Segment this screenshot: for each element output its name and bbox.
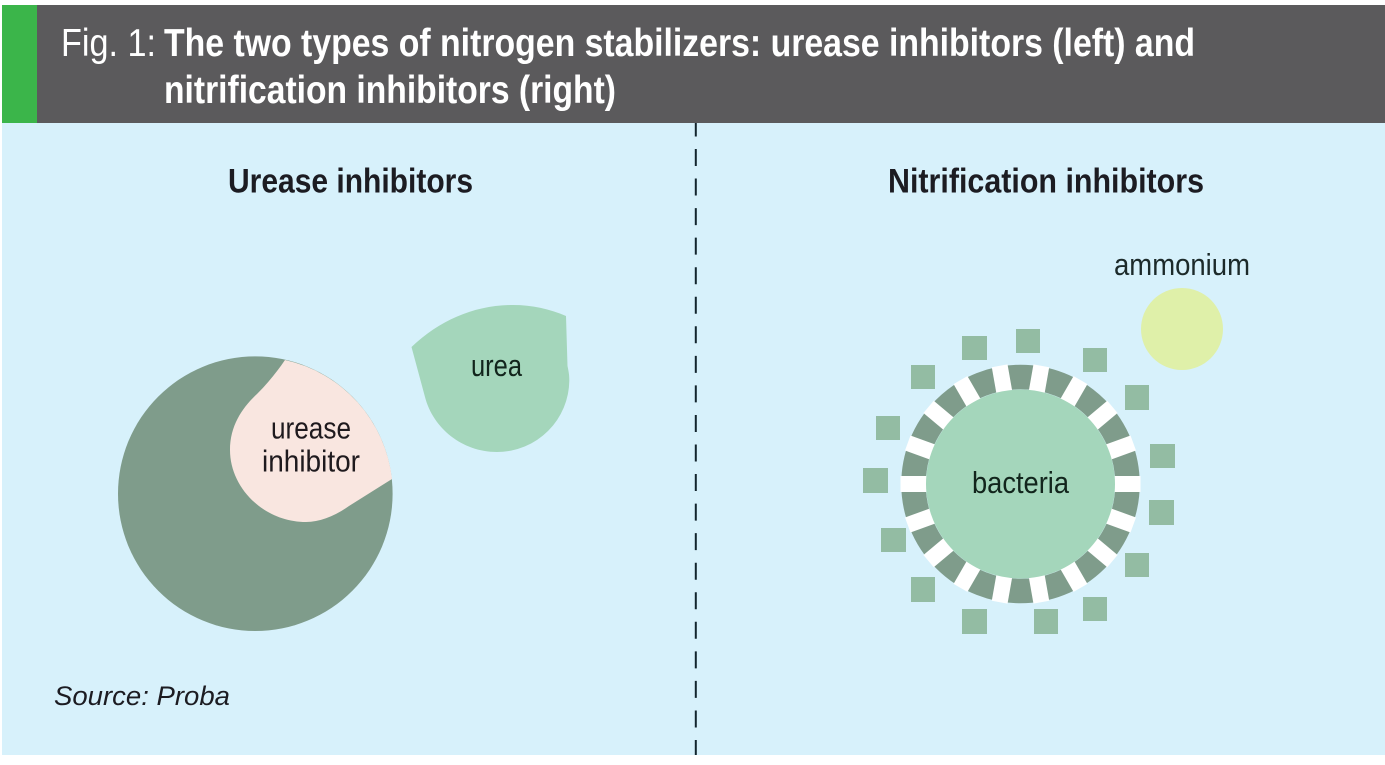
header bar bbox=[2, 5, 1385, 123]
green accent block bbox=[2, 5, 37, 123]
urea shape bbox=[412, 305, 569, 452]
bacterium membrane ring bbox=[900, 366, 1140, 602]
panel divider bbox=[695, 123, 697, 755]
enzyme circle bbox=[118, 356, 393, 631]
bacteria circle: bacteria bbox=[972, 465, 1070, 500]
title bbox=[164, 22, 1195, 112]
title: nitrification inhibitors (right) bbox=[164, 69, 616, 112]
ammonium circle bbox=[1141, 288, 1223, 370]
urease inhibitor shape: inhibitor bbox=[262, 444, 360, 478]
title: The two types of nitrogen stabilizers: urease inhibitors (left) and bbox=[164, 22, 1195, 65]
urease inhibitor shape bbox=[230, 360, 392, 522]
ammonium squares bbox=[863, 329, 1175, 634]
panel: urease inhibitors bbox=[54, 162, 569, 711]
source note: Source: Proba bbox=[54, 681, 230, 711]
ammonium label: ammonium bbox=[1114, 247, 1250, 282]
urea shape: urea bbox=[471, 348, 523, 383]
urease inhibitor shape: urease bbox=[271, 410, 351, 446]
figure number: Fig. 1: bbox=[61, 22, 156, 65]
heading: urease inhibitors: Urease inhibitors bbox=[228, 162, 473, 200]
bacteria circle bbox=[926, 390, 1115, 578]
heading: nitrification inhibitors: Nitrification inhibitors bbox=[888, 162, 1204, 200]
panel: nitrification inhibitors bbox=[863, 162, 1250, 634]
